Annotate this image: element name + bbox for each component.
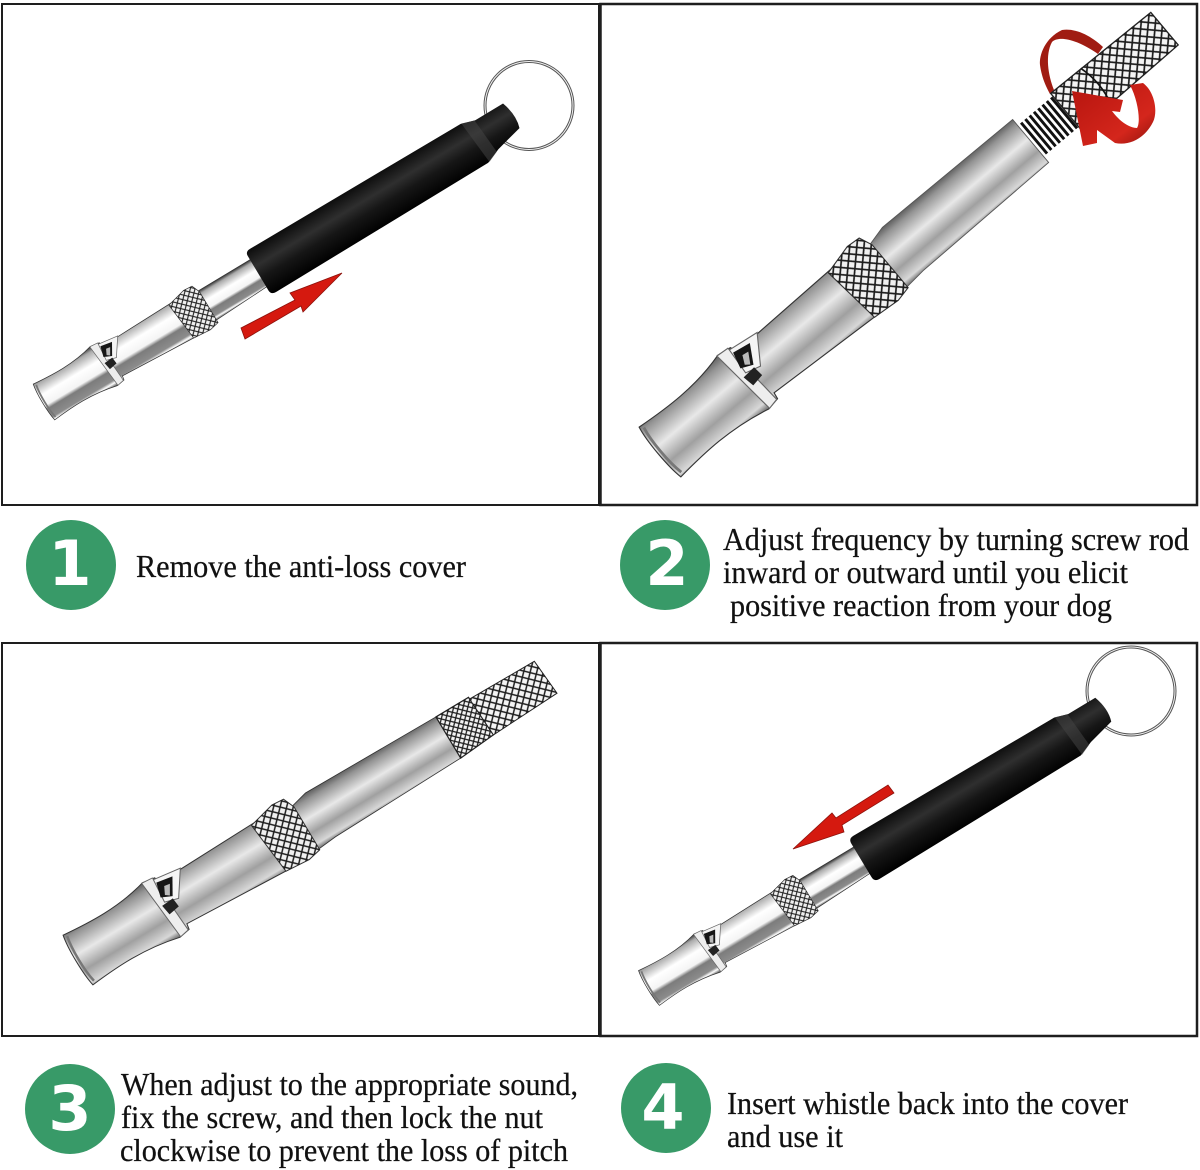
whistle body and black cover xyxy=(30,97,529,424)
illustration: whistle with screw, step 3 xyxy=(59,649,565,989)
arrow: red arrow pointing right xyxy=(241,273,342,339)
text: step 3 xyxy=(120,1066,578,1168)
badge: number 1 xyxy=(26,520,116,610)
badge: number 2 xyxy=(620,520,710,610)
step 1 caption xyxy=(26,520,466,610)
text: step 4: and use it xyxy=(727,1118,843,1154)
icon: rotation ribbon, back loop xyxy=(1040,30,1103,94)
step 4 caption xyxy=(621,1063,1128,1154)
arrow: red rotation arrow xyxy=(1072,83,1155,146)
badge: number 2: 2 xyxy=(645,527,689,600)
text: step 2 xyxy=(723,521,1189,623)
step 2 caption xyxy=(620,520,1189,623)
illustration: whistle with cover, step 4 xyxy=(635,647,1175,1010)
panel: step 3 frame xyxy=(2,643,599,1036)
whistle body and black cover xyxy=(635,691,1121,1010)
text: step 1: Remove the anti-loss cover xyxy=(136,548,466,584)
badge: number 1: 1 xyxy=(48,527,92,600)
icon: key ring xyxy=(1087,647,1175,735)
text: step 4: Insert whistle back into the cover xyxy=(727,1085,1128,1121)
text: step 4 xyxy=(727,1085,1128,1154)
badge: number 4: 4 xyxy=(641,1071,685,1144)
step 3 caption xyxy=(25,1064,578,1168)
illustration: whistle with cover, step 1 xyxy=(30,62,573,424)
badge: number 4 xyxy=(621,1063,711,1153)
whistle body and screw xyxy=(634,0,1188,482)
text: step 3: When adjust to the appropriate sound, xyxy=(121,1066,578,1102)
text: step 2: positive reaction from your dog xyxy=(730,587,1112,623)
text: step 2: inward or outward until you elicit xyxy=(723,554,1128,590)
icon: key ring xyxy=(485,62,573,150)
badge: number 3 xyxy=(25,1064,115,1154)
panel: step 1 frame xyxy=(2,4,599,505)
panel: step 2 frame xyxy=(600,4,1197,505)
panel: step 4 frame xyxy=(600,643,1197,1036)
arrow: red arrow pointing left xyxy=(793,785,894,849)
text: step 3: clockwise to prevent the loss of pitch xyxy=(120,1132,568,1168)
text: step 3: fix the screw, and then lock the nut xyxy=(121,1099,543,1135)
illustration: whistle with screw and rotation arrow, step 2 xyxy=(634,0,1188,482)
badge: number 3: 3 xyxy=(48,1072,92,1145)
